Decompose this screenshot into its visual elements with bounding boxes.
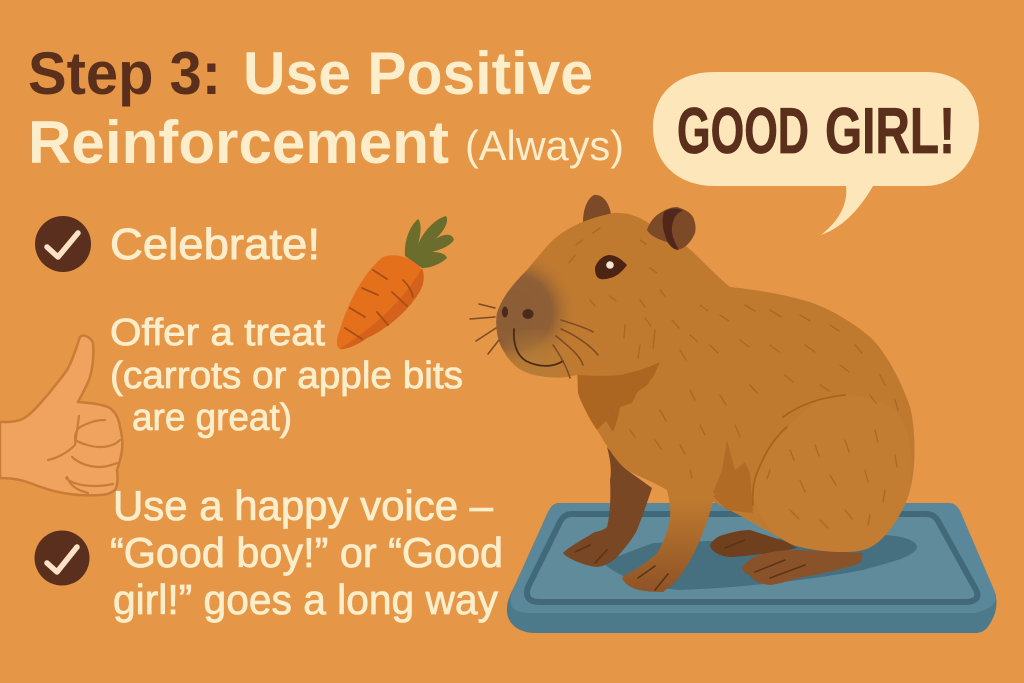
capybara bbox=[470, 195, 915, 592]
toe lines bbox=[575, 540, 805, 590]
check item: celebrate bbox=[35, 216, 320, 272]
speech bubble bbox=[653, 72, 979, 235]
near hind foot bbox=[742, 550, 863, 585]
check item: happy voice: girl!” goes a long way bbox=[113, 576, 498, 623]
nostrils and mouth bbox=[502, 306, 508, 318]
title bbox=[28, 40, 624, 176]
fur marks bbox=[569, 228, 898, 528]
title: (Always) bbox=[465, 122, 624, 169]
mat shadow bbox=[603, 535, 917, 590]
speech bubble: GIRL! bbox=[825, 94, 955, 167]
icon: carrot bbox=[337, 216, 454, 349]
treat text: (carrots or apple bits bbox=[110, 355, 463, 397]
eye bbox=[595, 255, 627, 279]
check item: happy voice: “Good boy!” or “Good bbox=[110, 529, 503, 576]
near ear bbox=[647, 207, 696, 249]
check item: happy voice bbox=[34, 482, 503, 623]
treat text bbox=[110, 312, 463, 439]
title: Use Positive bbox=[243, 40, 593, 107]
muzzle shading bbox=[496, 264, 566, 377]
title: Step 3: bbox=[28, 40, 221, 107]
chest ruff bbox=[578, 362, 660, 432]
near front leg bbox=[622, 490, 715, 592]
treat text: are great) bbox=[132, 397, 292, 439]
speech bubble: GOOD bbox=[677, 94, 809, 167]
title: Reinforcement bbox=[28, 109, 449, 176]
mat bbox=[507, 503, 996, 633]
check item: happy voice: Use a happy voice – bbox=[113, 482, 494, 529]
treat text: Offer a treat bbox=[110, 312, 325, 354]
belly shade bbox=[712, 440, 753, 513]
whiskers bbox=[470, 304, 598, 378]
far ear bbox=[583, 195, 611, 222]
far hind foot bbox=[710, 530, 797, 557]
far front leg bbox=[563, 447, 652, 567]
body bbox=[496, 213, 915, 552]
check item: celebrate: Celebrate! bbox=[110, 220, 320, 269]
hind thigh bbox=[753, 395, 912, 552]
icon: thumbs up hand bbox=[0, 336, 122, 495]
